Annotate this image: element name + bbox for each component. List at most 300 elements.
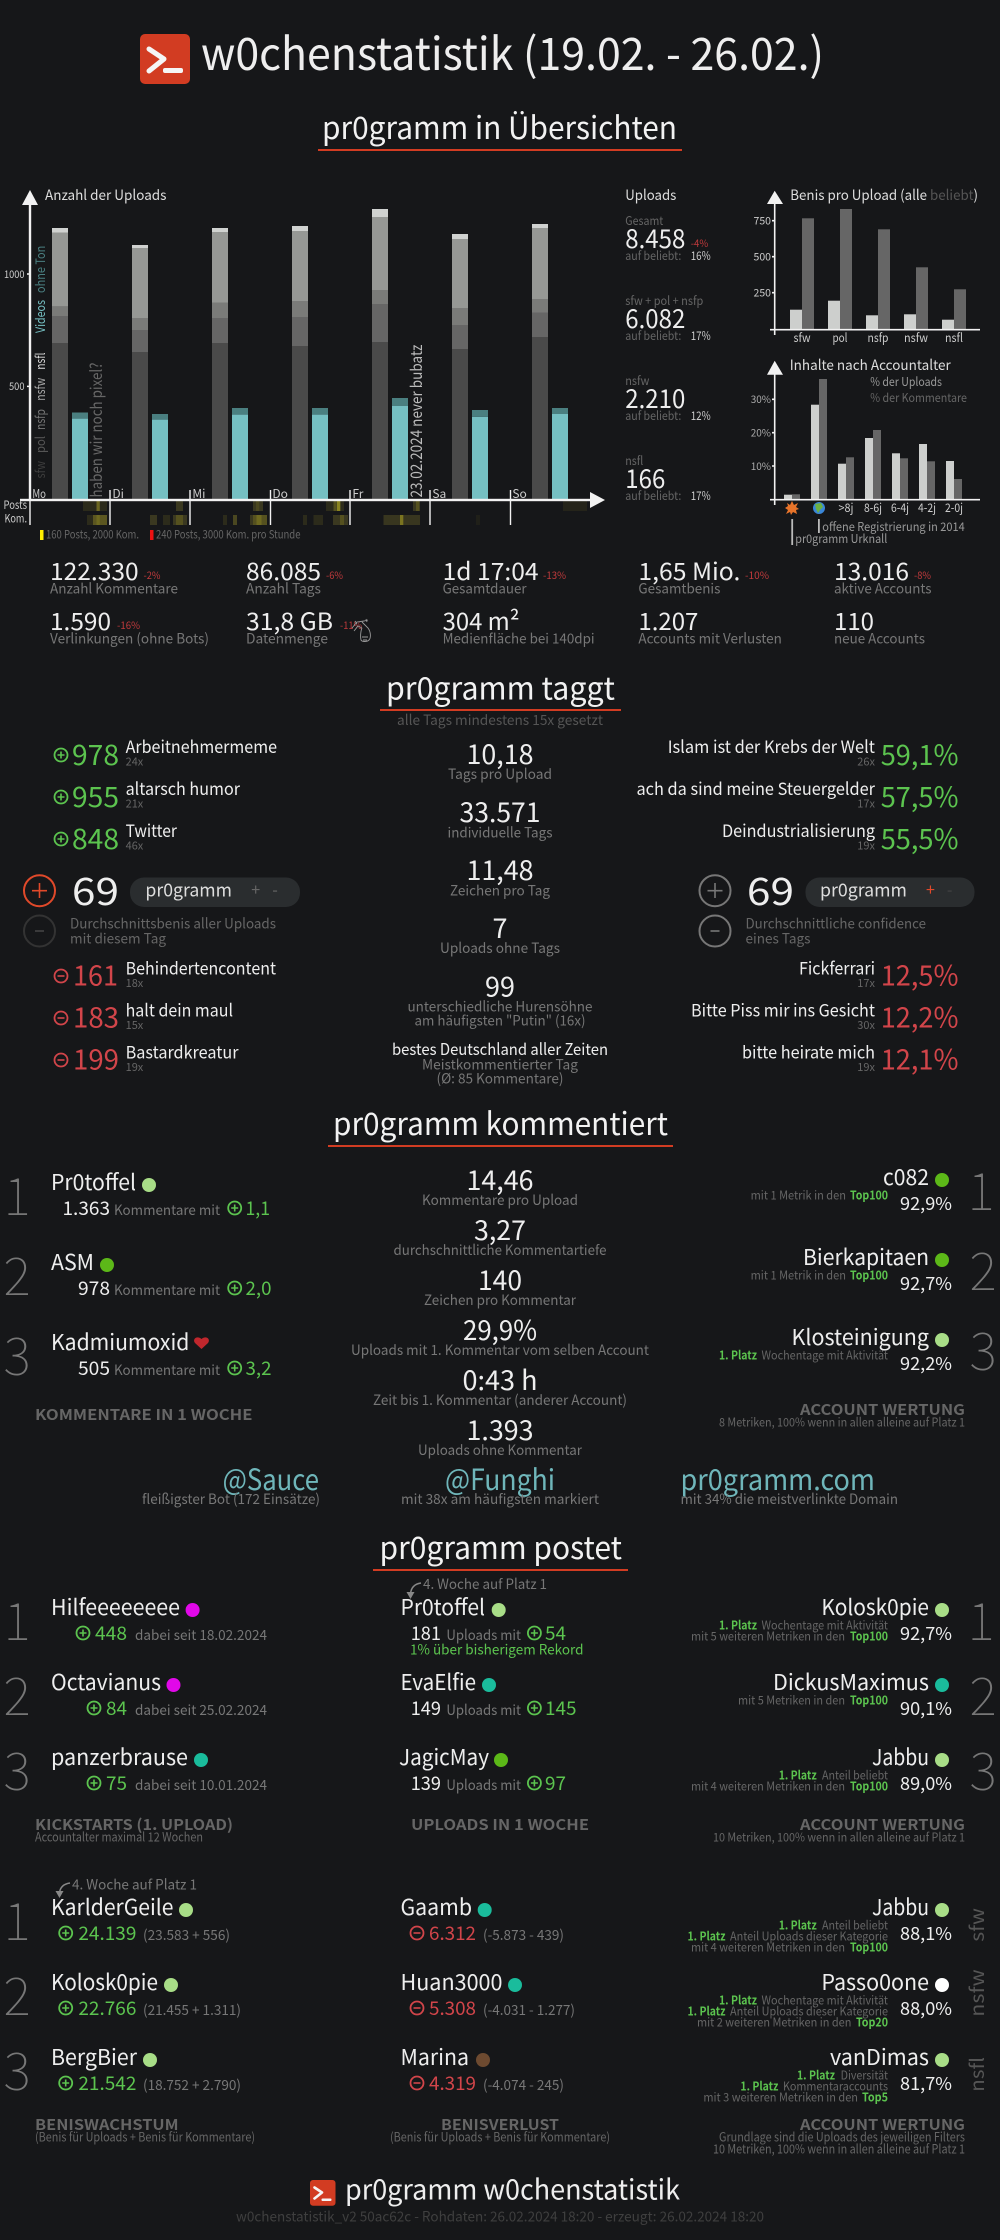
footer logo	[310, 2180, 336, 2206]
ranking: kickstarts: Hilfeeeeeeee	[51, 1590, 180, 1622]
icon: heart	[194, 1337, 209, 1349]
stats grid: Anzahl Kommentare	[50, 579, 178, 599]
stats grid: Accounts mit Verlusten	[638, 629, 782, 649]
ranking: account score by filter: Passo0one	[821, 1965, 929, 1997]
stats grid: Anzahl Tags	[246, 579, 321, 599]
ranking: account score (uploads): 1. Platz	[719, 1616, 757, 1633]
list: worst tags by confidence: bitte heirate mich	[742, 1039, 875, 1064]
list: best tags by benis: 46x	[126, 838, 144, 854]
ranking: comments in one week: 2,0	[246, 1274, 272, 1301]
highlight: most tagged: mit 38x am häufigsten markiert	[401, 1489, 600, 1509]
stats grid: Verlinkungen (ohne Bots)	[50, 629, 209, 649]
axis labels: Kom.	[4, 510, 27, 526]
axis labels: Fr	[352, 485, 364, 502]
ranking: account score (uploads): DickusMaximus	[773, 1665, 929, 1697]
ranking: benis growth: 22.766	[78, 1994, 136, 2021]
ranking: comments in one week: Kommentare mit	[114, 1280, 221, 1300]
footer meta: w0chenstatistik_v2 50ac62c - Rohdaten: 26.02.2024 18:20 - erzeugt: 26.02.2024 18:20	[236, 2207, 764, 2227]
center column: tag stats	[392, 733, 608, 1089]
ranking: account score by filter: mit 2 weiteren Metriken in den	[697, 2013, 851, 2030]
ranking: kickstarts: 3	[3, 1730, 31, 1805]
ranking: account score by filter: ACCOUNT WERTUNG	[799, 2114, 965, 2135]
panel: Uploads totals: nsfl	[625, 452, 643, 469]
chart: Benis pro Upload: 750	[754, 214, 771, 228]
center column: comment stats: 3,27	[474, 1209, 526, 1248]
tag widget: benis: Durchschnittsbenis aller Uploads	[70, 914, 276, 934]
highlight: most tagged	[401, 1457, 600, 1509]
highlight: busiest bot: @Sauce	[223, 1457, 319, 1499]
ranking: benis growth: 24.139	[78, 1919, 136, 1946]
ranking: account score (comments): Wochentage mit Aktivität	[762, 1346, 888, 1363]
center column: comment stats: Kommentare pro Upload	[422, 1190, 578, 1210]
ranking: account score (uploads): Kolosk0pie	[821, 1590, 929, 1622]
panel: Uploads totals: auf beliebt:	[625, 327, 681, 344]
center column: comment stats: 1.393	[466, 1409, 534, 1448]
ranking: account score by filter: Top20	[856, 2013, 888, 2030]
ranking: benis loss: 4.319	[429, 2069, 476, 2096]
ranking: account score (comments): ACCOUNT WERTUNG	[799, 1399, 965, 1420]
ranking: benis growth: 21.542	[78, 2069, 136, 2096]
chart: Inhalte nach Accountalter: 10%	[751, 458, 771, 473]
list: worst tags by benis: 183	[73, 997, 119, 1037]
center column: comment stats: 14,46	[466, 1159, 534, 1198]
ranking: kickstarts: Octavianus	[51, 1665, 161, 1697]
panel: Uploads totals: 17%	[691, 487, 711, 504]
list: best tags by confidence: 59,1%	[881, 734, 958, 774]
ranking: benis growth: KarlderGeile	[51, 1890, 174, 1922]
ranking: comments in one week: Kadmiumoxid	[51, 1325, 189, 1357]
center column: tag stats: Uploads ohne Tags	[440, 938, 560, 958]
axis labels: Sa	[432, 485, 446, 502]
heat legend: 160 Posts, 2000 Kom.	[46, 527, 139, 543]
list: best tags by confidence: 19x	[857, 838, 876, 854]
ranking: account score (uploads): mit 5 weiteren Metriken in den	[691, 1627, 845, 1644]
tag widget: benis: mit diesem Tag	[70, 929, 166, 949]
ranking: account score by filter: Kommentaraccounts	[783, 2077, 888, 2094]
chart: Inhalte nach Accountalter: 4-2j	[918, 499, 936, 516]
ranking: account score (uploads): Anteil beliebt	[822, 1766, 888, 1783]
ranking: comments in one week: 1.363	[62, 1194, 110, 1221]
ranking: comments in one week: 3,2	[246, 1354, 272, 1381]
stats grid: -2%	[144, 567, 160, 582]
tag widget: confidence: pr0gramm	[820, 876, 907, 902]
heading: pr0gramm postet: pr0gramm postet	[380, 1523, 622, 1568]
tag widget: benis: +	[251, 876, 260, 900]
ranking: account score by filter: 81,7%	[900, 2070, 952, 2096]
center column: comment stats: Zeichen pro Kommentar	[424, 1290, 577, 1310]
chart: Inhalte nach Accountalter	[751, 355, 980, 547]
chart: Anzahl der Uploads	[4, 185, 605, 543]
ranking: account score (uploads): 2	[969, 1655, 997, 1730]
ranking: uploads in one week: Pr0toffel	[400, 1590, 485, 1622]
ranking: comments in one week: 505	[78, 1354, 110, 1381]
list: worst tags by confidence	[691, 955, 958, 1079]
highlight: most tagged: @Funghi	[445, 1457, 555, 1499]
ranking: uploads in one week: UPLOADS IN 1 WOCHE	[411, 1814, 589, 1835]
list: worst tags by confidence: 12,5%	[881, 955, 958, 995]
list: worst tags by confidence: 19x	[857, 1059, 876, 1075]
ranking: account score by filter: Anteil Uploads dieser Kategorie	[730, 2002, 888, 2019]
list: best tags by benis: Arbeitnehmermeme	[126, 733, 277, 758]
highlight: most linked domain: pr0gramm.com	[680, 1457, 875, 1499]
rotated series legend: pol	[30, 436, 49, 453]
heading: pr0gramm taggt	[380, 664, 621, 730]
stats grid: aktive Accounts	[834, 579, 932, 599]
panel: Uploads totals: 17%	[691, 327, 711, 344]
center column: tag stats: (Ø: 85 Kommentare)	[436, 1069, 564, 1089]
ranking: account score by filter: Grundlage sind die Uploads des jeweiligen Filters	[719, 2127, 965, 2146]
ranking: comments in one week	[3, 1155, 272, 1425]
axis labels: 500	[9, 379, 25, 394]
ranking: kickstarts: 84	[106, 1694, 127, 1721]
ranking: account score by filter: 1. Platz	[779, 1916, 817, 1933]
stats grid: -6%	[326, 567, 343, 582]
ranking: benis growth: (21.455 + 1.311)	[143, 2000, 241, 2020]
icon: explosion	[785, 501, 799, 515]
chart: Inhalte nach Accountalter: Inhalte nach Accountalter	[790, 355, 951, 375]
list: best tags by confidence: 17x	[857, 796, 876, 812]
ranking: account score (comments): 92,2%	[900, 1350, 952, 1376]
ranking: account score by filter: 1. Platz	[688, 1927, 726, 1944]
list: worst tags by confidence: 12,1%	[881, 1039, 958, 1079]
chart: Inhalte nach Accountalter: 8-6j	[864, 499, 882, 516]
ranking: account score (comments): 92,9%	[900, 1190, 952, 1216]
ranking: benis growth: 1	[3, 1880, 31, 1955]
ranking: account score (comments): Klosteinigung	[792, 1320, 930, 1352]
ranking: benis growth: BENISWACHSTUM	[35, 2114, 179, 2135]
ranking: account score by filter: vanDimas	[830, 2040, 929, 2072]
axis labels: 1000	[4, 267, 25, 282]
chart: Inhalte nach Accountalter: 2-0j	[945, 499, 963, 516]
ranking: uploads in one week	[399, 1574, 589, 1835]
ranking: uploads in one week: JagicMay	[399, 1740, 490, 1772]
tag widget: benis: pr0gramm	[145, 876, 232, 902]
ranking: benis loss: (-4.074 - 245)	[483, 2075, 564, 2095]
ranking: account score (uploads): 10 Metriken, 100% wenn in allen alleine auf Platz 1	[713, 1829, 965, 1846]
center column: comment stats: Zeit bis 1. Kommentar (anderer Account)	[373, 1390, 627, 1410]
ranking: account score (comments): 92,7%	[900, 1270, 952, 1296]
tag widget: benis	[24, 861, 300, 949]
center column: tag stats: unterschiedliche Hurensöhne	[408, 996, 593, 1016]
list: worst tags by benis: Bastardkreatur	[126, 1039, 239, 1064]
ranking: account score (uploads): Top100	[850, 1627, 888, 1644]
chart: Benis pro Upload: nsfw	[904, 329, 928, 346]
ranking: comments in one week: Kommentare mit	[114, 1360, 221, 1380]
stats grid: 1d 17:04	[443, 552, 539, 587]
ranking: kickstarts: Accountalter maximal 12 Wochen	[35, 1827, 203, 1846]
highlight: most linked domain: mit 34% die meistverlinkte Domain	[680, 1489, 898, 1509]
ranking: account score by filter: mit 3 weiteren Metriken in den	[703, 2088, 858, 2105]
ranking: account score (comments): Bierkapitaen	[803, 1240, 929, 1272]
panel: Uploads totals: Uploads	[625, 185, 677, 205]
teal video bars	[72, 398, 568, 499]
list: worst tags by benis: Behindertencontent	[126, 955, 277, 980]
stats grid: 1,65 Mio.	[638, 552, 740, 587]
activity heat strips	[83, 501, 587, 525]
list: best tags by benis: 978	[72, 734, 119, 774]
ranking: comments in one week: ASM	[51, 1245, 94, 1277]
ranking: account score by filter: sfw	[963, 1908, 990, 1942]
ranking: account score by filter: 1. Platz	[797, 2066, 835, 2083]
ranking: benis loss: 6.312	[429, 1919, 476, 1946]
ranking: uploads in one week: 54	[545, 1619, 566, 1646]
axis labels: Mi	[192, 485, 205, 502]
ranking: account score (comments): mit 1 Metrik in den	[751, 1266, 846, 1283]
ranking: account score by filter: Diversität	[841, 2066, 888, 2083]
ranking: account score by filter: mit 4 weiteren Metriken in den	[691, 1938, 845, 1955]
stats grid: 13.016	[834, 552, 909, 587]
list: worst tags by benis: 18x	[126, 975, 144, 991]
axis labels: Di	[112, 485, 124, 502]
heat legend	[40, 527, 300, 543]
panel: Uploads totals: auf beliebt:	[625, 247, 681, 264]
rotated annotation: bubatz: 23.02.2024 never bubatz	[403, 344, 427, 498]
center column: tag stats: Meistkommentierter Tag	[422, 1055, 578, 1075]
ranking: account score (uploads): Top100	[850, 1691, 888, 1708]
heading: pr0gramm taggt: alle Tags mindestens 15x gesetzt	[397, 710, 604, 730]
ranking: comments in one week: Pr0toffel	[51, 1165, 136, 1197]
stats grid	[50, 552, 932, 649]
stats grid: 86.085	[246, 552, 321, 587]
highlight: busiest bot	[142, 1457, 320, 1509]
ranking: benis loss: Gaamb	[400, 1890, 472, 1922]
list: best tags by confidence	[636, 733, 958, 858]
list: worst tags by benis: 199	[73, 1039, 119, 1079]
ranking: benis loss: (Benis für Uploads + Benis für Kommentare)	[390, 2127, 610, 2146]
ranking: account score (uploads): 90,1%	[900, 1695, 952, 1721]
ranking: uploads in one week: EvaElfie	[400, 1665, 476, 1697]
ranking: account score (comments): Top100	[850, 1186, 888, 1203]
ranking: comments in one week: 3	[3, 1315, 31, 1390]
ranking: account score by filter: 1. Platz	[719, 1991, 757, 2008]
center column: tag stats: 11,48	[466, 849, 534, 888]
ranking: comments in one week: 1,1	[246, 1194, 270, 1221]
ranking: account score (uploads): Top100	[850, 1777, 888, 1794]
panel: Uploads totals: auf beliebt:	[625, 487, 681, 504]
ranking: account score (uploads): 1. Platz	[779, 1766, 817, 1783]
list: best tags by confidence: 55,5%	[881, 818, 958, 858]
panel: Uploads totals: 2.210	[625, 379, 685, 416]
chart: Benis pro Upload	[754, 185, 980, 346]
ranking: uploads in one week: 4. Woche auf Platz 1	[423, 1574, 547, 1594]
panel: Uploads totals: nsfw	[625, 372, 650, 389]
rotated series legend: ohne Ton	[30, 246, 49, 293]
ranking: benis loss: Marina	[400, 2040, 469, 2072]
ranking: account score (comments): 2	[969, 1230, 997, 1305]
ranking: benis growth: 3	[3, 2030, 31, 2105]
ranking: kickstarts: 75	[106, 1769, 127, 1796]
center column: comment stats: 140	[478, 1259, 522, 1298]
center column: tag stats: am häufigsten "Putin" (16x)	[414, 1011, 586, 1031]
chart: Inhalte nach Accountalter: 30%	[751, 391, 771, 406]
center column: tag stats: 7	[492, 907, 508, 946]
list: best tags by confidence: Deindustrialisierung	[722, 817, 875, 842]
ranking: uploads in one week: 139	[411, 1769, 441, 1796]
ranking: account score by filter: Top5	[862, 2088, 888, 2105]
ranking: kickstarts: 448	[95, 1619, 127, 1646]
list: worst tags by confidence: Fickferrari	[799, 955, 875, 980]
center column: tag stats: bestes Deutschland aller Zeiten	[392, 1036, 608, 1060]
tag widget: confidence: 69	[747, 861, 794, 916]
ranking: account score (comments): 1	[967, 1150, 995, 1225]
stats grid: 122.330	[50, 552, 139, 587]
footer title: pr0gramm w0chenstatistik	[345, 2168, 681, 2208]
axis labels: Posts	[4, 497, 27, 513]
header logo	[140, 34, 190, 84]
heading: pr0gramm in Übersichten: pr0gramm in Übersichten	[322, 103, 677, 148]
ranking: account score (uploads): 89,0%	[900, 1770, 952, 1796]
ranking: account score by filter	[688, 1890, 990, 2157]
tag widget: confidence	[700, 861, 974, 949]
ranking: kickstarts: dabei seit 18.02.2024	[135, 1625, 267, 1645]
list: worst tags by confidence: Bitte Piss mir ins Gesicht	[691, 997, 876, 1022]
ranking: account score by filter: Top100	[850, 1938, 888, 1955]
stats grid: 1.590	[50, 602, 111, 637]
list: worst tags by benis: 161	[73, 955, 118, 995]
ranking: account score by filter: Jabbu	[872, 1890, 929, 1922]
ranking: account score (uploads): 92,7%	[900, 1620, 952, 1646]
ranking: account score by filter: 88,0%	[900, 1995, 952, 2021]
ranking: uploads in one week: 145	[545, 1694, 576, 1721]
chart: Benis pro Upload: Benis pro Upload (alle beliebt)	[790, 185, 978, 205]
tag widget: benis: 69	[72, 861, 119, 916]
rotated series legend: sfw	[30, 461, 49, 478]
list: worst tags by benis	[54, 955, 277, 1079]
arrow: record note	[406, 1583, 421, 1599]
ranking: account score by filter: nsfl	[963, 2057, 990, 2092]
ranking: benis growth: BergBier	[51, 2040, 137, 2072]
panel: Uploads totals: 12%	[691, 407, 711, 424]
center column: comment stats	[351, 1159, 650, 1460]
ranking: account score by filter: 10 Metriken, 100% wenn in allen alleine auf Platz 1	[713, 2138, 965, 2157]
ranking: kickstarts: 1	[3, 1580, 31, 1655]
ranking: benis growth: Kolosk0pie	[51, 1965, 158, 1997]
ranking: kickstarts: dabei seit 25.02.2024	[135, 1700, 267, 1720]
ranking: benis loss: (-4.031 - 1.277)	[483, 2000, 575, 2020]
center column: tag stats: Zeichen pro Tag	[450, 880, 550, 900]
panel: Uploads totals: 8.458	[625, 219, 685, 256]
stats grid: 31,8 GB	[246, 602, 333, 637]
ranking: uploads in one week: 97	[545, 1769, 566, 1796]
ranking: account score (comments)	[719, 1150, 997, 1431]
tag widget: confidence: eines Tags	[746, 929, 811, 949]
ranking: benis growth: (18.752 + 2.790)	[143, 2075, 241, 2095]
panel: Uploads totals: 16%	[691, 247, 711, 264]
center column: comment stats: 0:43 h	[462, 1359, 538, 1398]
ranking: comments in one week: 2	[3, 1235, 31, 1310]
ranking: account score by filter: Anteil beliebt	[822, 1916, 888, 1933]
ranking: benis loss: Huan3000	[400, 1965, 502, 1997]
chart: Inhalte nach Accountalter: pr0gramm Urknall	[795, 530, 887, 547]
stats grid: 1.207	[638, 602, 698, 637]
list: worst tags by confidence: 30x	[857, 1017, 876, 1033]
tag widget: confidence: -	[947, 876, 952, 900]
stats grid: Datenmenge	[246, 629, 328, 649]
list: best tags by benis: altarsch humor	[126, 775, 240, 800]
arrow: growth note	[56, 1883, 70, 1898]
stats grid: Medienfläche bei 140dpi	[443, 629, 595, 649]
ranking: account score (comments): 8 Metriken, 100% wenn in allen alleine auf Platz 1	[719, 1414, 965, 1431]
chart: Benis pro Upload: nsfl	[945, 329, 963, 346]
ranking: comments in one week: 1	[3, 1155, 31, 1230]
ranking: kickstarts	[3, 1580, 267, 1846]
ranking: benis loss: BENISVERLUST	[441, 2114, 559, 2135]
center column: tag stats: 33.571	[460, 791, 540, 830]
stats grid: neue Accounts	[834, 629, 925, 649]
ranking: uploads in one week: Uploads mit	[446, 1700, 522, 1720]
axis labels: So	[512, 485, 527, 502]
panel: Uploads totals: -4%	[691, 235, 708, 250]
axis labels: Do	[272, 485, 288, 502]
chart: Benis pro Upload: sfw	[794, 329, 811, 346]
ranking: benis loss: (-5.873 - 439)	[483, 1925, 564, 1945]
ranking: account score by filter: 88,1%	[900, 1920, 952, 1946]
chart: Inhalte nach Accountalter: % der Uploads	[870, 373, 942, 390]
center column: tag stats: 99	[485, 965, 515, 1004]
ranking: benis growth: 4. Woche auf Platz 1	[72, 1874, 197, 1894]
ranking: account score (comments): 3	[969, 1310, 997, 1385]
ranking: comments in one week: Kommentare mit	[114, 1200, 221, 1220]
list: best tags by benis: 955	[72, 776, 119, 816]
ranking: benis growth: (Benis für Uploads + Benis für Kommentare)	[35, 2127, 255, 2146]
stats grid: Gesamtbenis	[638, 579, 721, 599]
ranking: kickstarts: 2	[3, 1655, 31, 1730]
chart: Inhalte nach Accountalter: 6-4j	[891, 499, 909, 516]
center column: comment stats: 29,9%	[463, 1309, 537, 1348]
ranking: benis growth: (23.583 + 556)	[143, 1925, 230, 1945]
ranking: uploads in one week: 149	[411, 1694, 441, 1721]
ranking: kickstarts: panzerbrause	[51, 1740, 188, 1772]
axis labels: Mo	[32, 485, 46, 502]
rotated series legend: nsfw	[30, 377, 49, 401]
title: w0chenstatistik (19.02. - 26.02.)	[201, 18, 824, 83]
list: worst tags by confidence: 17x	[857, 975, 876, 991]
tag widget: confidence: Durchschnittliche confidence	[746, 914, 926, 934]
ranking: account score by filter: Wochentage mit Aktivität	[762, 1991, 888, 2008]
ranking: benis loss: 5.308	[429, 1994, 476, 2021]
center column: comment stats: Uploads mit 1. Kommentar vom selben Account	[351, 1340, 650, 1360]
ranking: benis growth	[3, 1874, 255, 2146]
stats grid: -11%	[340, 617, 362, 632]
chart: Benis pro Upload: nsfp	[868, 329, 888, 346]
ranking: account score by filter: nsfw	[963, 1969, 990, 2017]
ranking: account score (uploads): 1	[967, 1580, 995, 1655]
list: best tags by confidence: 57,5%	[881, 776, 958, 816]
stats grid: -16%	[117, 617, 140, 632]
rotated series legend	[30, 246, 49, 478]
stats grid: -10%	[745, 567, 769, 582]
highlight: busiest bot: fleißigster Bot (172 Einsätze)	[142, 1489, 320, 1509]
center column: comment stats: durchschnittliche Kommentartiefe	[394, 1240, 607, 1260]
ranking: uploads in one week: 181	[411, 1619, 441, 1646]
rotated annotation: pixel: haben wir noch pixel?	[83, 362, 107, 498]
axis labels	[4, 185, 527, 526]
chart: Benis pro Upload: 250	[754, 286, 771, 300]
panel: Uploads totals: sfw + pol + nsfp	[625, 292, 703, 309]
stats grid: -13%	[543, 567, 566, 582]
axes	[20, 190, 605, 525]
panel: Uploads totals	[625, 185, 711, 504]
list: best tags by benis: Twitter	[126, 817, 177, 842]
list: best tags by confidence: ach da sind meine Steuergelder	[636, 775, 875, 800]
ranking: benis growth: 2	[3, 1955, 31, 2030]
chart: Inhalte nach Accountalter: >8j	[838, 499, 854, 516]
tag widget: benis: -	[272, 876, 278, 900]
ranking: comments in one week: 978	[78, 1274, 110, 1301]
ranking: account score (comments): c082	[883, 1160, 929, 1192]
ranking: kickstarts: KICKSTARTS (1. UPLOAD)	[35, 1814, 233, 1835]
panel: Uploads totals: auf beliebt:	[625, 407, 681, 424]
